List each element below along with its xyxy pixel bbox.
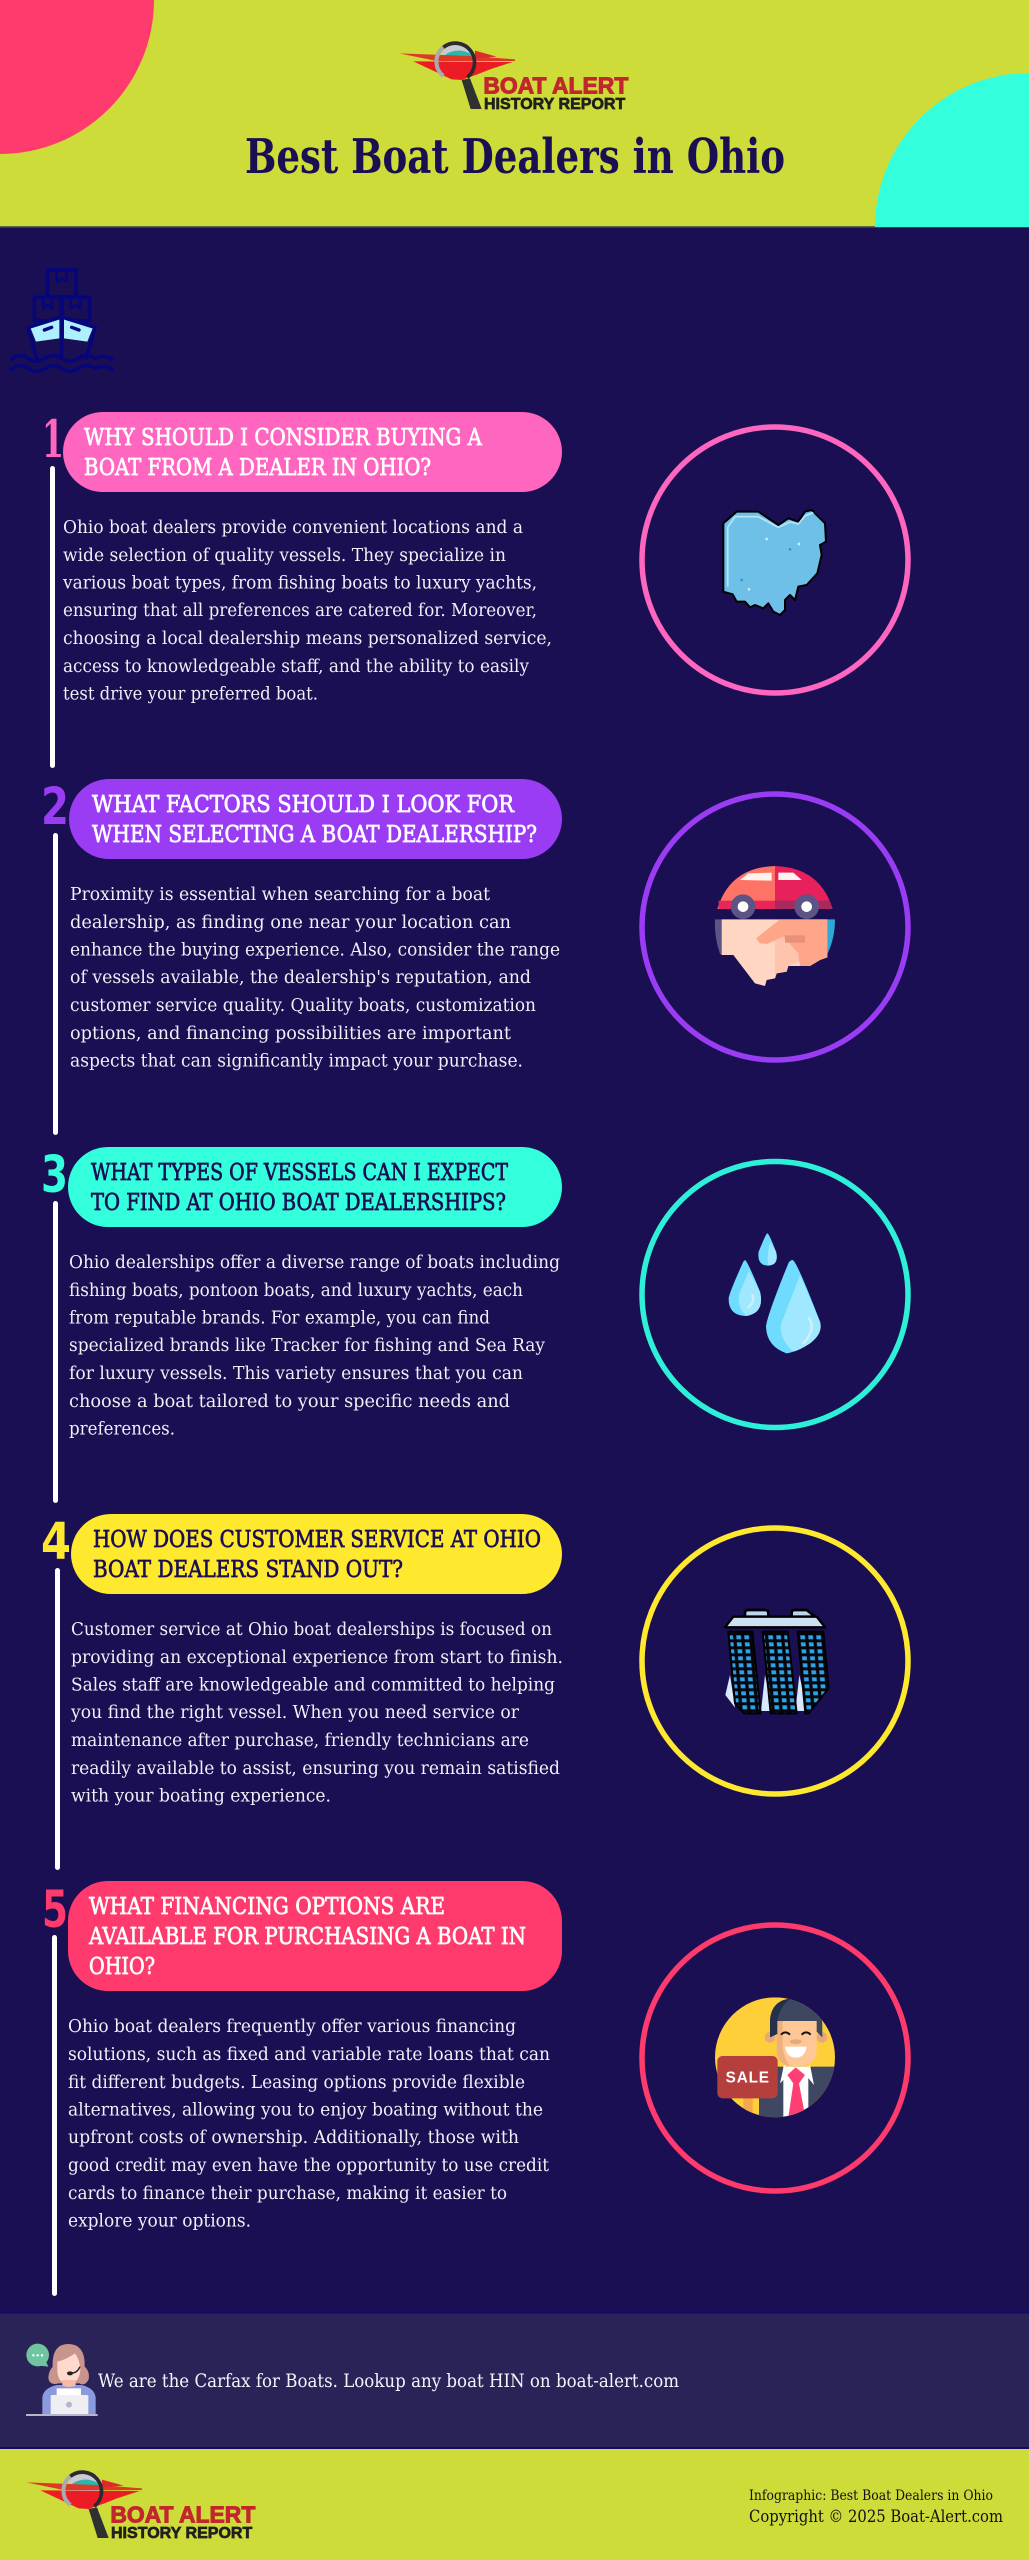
icon ring 4 with towers (642, 1528, 908, 1794)
body text 4: maintenance after purchase, friendly technicians are (71, 1731, 529, 1751)
heading pill 4: BOAT DEALERS STAND OUT? (93, 1557, 403, 1583)
callout text: We are the Carfax for Boats. Lookup any boat HIN on boat-alert.com (98, 2371, 679, 2392)
body text 4: Customer service at Ohio boat dealerships is focused on (71, 1620, 552, 1640)
callout band (0, 2312, 1029, 2449)
logo: Boat Alert footer: HISTORY REPORT (111, 2525, 253, 2542)
body text 2: of vessels available, the dealership's reputation, and (70, 968, 531, 988)
body text 2: options, and financing possibilities are important (70, 1024, 511, 1044)
heading pill 2 (69, 779, 562, 859)
body text 5: good credit may even have the opportunity to use credit (68, 2156, 549, 2176)
number 2: 2 (41, 778, 69, 837)
body text 1: various boat types, from fishing boats to luxury yachts, (62, 574, 537, 594)
body text 1: Ohio boat dealers provide convenient locations and a (63, 518, 523, 538)
body text 5: fit different budgets. Leasing options provide flexible (68, 2073, 525, 2093)
body text 5: upfront costs of ownership. Additionally, those with (68, 2128, 519, 2148)
body text 1: test drive your preferred boat. (63, 684, 318, 704)
timeline bar 5 (52, 1935, 57, 2296)
heading pill 2: WHEN SELECTING A BOAT DEALERSHIP? (92, 822, 537, 848)
heading pill 4: HOW DOES CUSTOMER SERVICE AT OHIO (93, 1527, 541, 1553)
number 4: 4 (41, 1513, 71, 1572)
body text 2: Proximity is essential when searching for a boat (70, 885, 490, 905)
decorative red quarter circle (0, 0, 154, 154)
body text 2 (70, 885, 560, 1072)
heading pill 1: BOAT FROM A DEALER IN OHIO? (84, 455, 431, 481)
body text 5: Ohio boat dealers frequently offer various financing (68, 2017, 516, 2037)
body text 2: dealership, as finding one near your location can (70, 913, 511, 933)
panel: section 3 (41, 1146, 908, 1503)
body text 1 (62, 518, 552, 704)
body text 5: solutions, such as fixed and variable rate loans that can (68, 2045, 550, 2065)
body text 4: you find the right vessel. When you need service or (70, 1703, 520, 1723)
number 3: 3 (41, 1146, 68, 1205)
heading pill 5: WHAT FINANCING OPTIONS ARE (89, 1894, 445, 1920)
body text 3: for luxury vessels. This variety ensures that you can (69, 1364, 523, 1384)
heading pill 3: TO FIND AT OHIO BOAT DEALERSHIPS? (91, 1190, 506, 1216)
timeline bar 2 (53, 833, 58, 1135)
body text 3: from reputable brands. For example, you can find (69, 1308, 490, 1328)
body text 2: aspects that can significantly impact your purchase. (70, 1052, 523, 1072)
heading pill 1: WHY SHOULD I CONSIDER BUYING A (84, 425, 482, 451)
body text 1: ensuring that all preferences are catered for. Moreover, (63, 601, 537, 621)
number 1: 1 (42, 410, 64, 470)
heading pill 5 (68, 1881, 562, 1991)
logo: Boat Alert header (399, 43, 628, 113)
panel: section 1 (42, 410, 908, 768)
body text 3: Ohio dealerships offer a diverse range of boats including (69, 1253, 560, 1273)
body text 5 (68, 2017, 550, 2232)
body text 3: preferences. (69, 1420, 175, 1440)
icon ring 3 with water drops (642, 1162, 908, 1428)
footer credit: Infographic: Best Boat Dealers in Ohio (749, 2488, 993, 2504)
logo: Boat Alert footer: BOAT ALERT (110, 2501, 255, 2527)
panel: section 5 (42, 1881, 908, 2296)
heading pill 5: OHIO? (89, 1954, 155, 1980)
panel: section 4 (41, 1513, 908, 1870)
body text 3: choose a boat tailored to your specific needs and (69, 1392, 510, 1412)
body text 5: alternatives, allowing you to enjoy boating without the (68, 2100, 543, 2120)
timeline bar 1 (50, 466, 55, 768)
timeline bar 3 (53, 1201, 58, 1503)
icon ring 1 with Ohio map (642, 427, 908, 693)
logo: Boat Alert header: HISTORY REPORT (484, 96, 626, 113)
heading pill 3 (68, 1147, 562, 1227)
icon: cargo ship (12, 270, 112, 371)
body text 1: access to knowledgeable staff, and the ability to easily (63, 657, 529, 677)
body text 3: fishing boats, pontoon boats, and luxury yachts, each (69, 1281, 523, 1301)
logo: Boat Alert footer (26, 2472, 255, 2542)
body text 2: enhance the buying experience. Also, consider the range (70, 940, 560, 960)
body text 4: providing an exceptional experience from start to finish. (71, 1648, 563, 1668)
body text 4: Sales staff are knowledgeable and committed to helping (71, 1676, 555, 1696)
timeline bar 4 (55, 1568, 60, 1870)
body text 4: readily available to assist, ensuring you remain satisfied (71, 1759, 560, 1779)
header band (0, 0, 1029, 228)
title: Best Boat Dealers in Ohio (245, 129, 785, 185)
body text 5: cards to finance their purchase, making it easier to (68, 2184, 507, 2204)
footer band (0, 2449, 1029, 2560)
heading pill 5: AVAILABLE FOR PURCHASING A BOAT IN (88, 1924, 526, 1950)
body text 1: wide selection of quality vessels. They specialize in (63, 546, 506, 566)
body text 3: specialized brands like Tracker for fishing and Sea Ray (69, 1336, 545, 1356)
number 5: 5 (42, 1881, 68, 1940)
heading pill 1 (63, 412, 562, 492)
body text 2: customer service quality. Quality boats, customization (70, 996, 536, 1016)
body text 4 (70, 1620, 563, 1806)
icon ring 5 with salesman: SALE (726, 2070, 769, 2087)
heading pill 2: WHAT FACTORS SHOULD I LOOK FOR (92, 792, 515, 818)
heading pill 4 (71, 1514, 562, 1594)
icon ring 2 with car and handshake (642, 794, 908, 1060)
decorative teal quarter circle (875, 73, 1029, 227)
body text 4: with your boating experience. (71, 1786, 331, 1806)
heading pill 3: WHAT TYPES OF VESSELS CAN I EXPECT (91, 1160, 509, 1186)
body text 5: explore your options. (68, 2212, 251, 2232)
body text 1: choosing a local dealership means personalized service, (63, 629, 552, 649)
panel: section 2 (41, 778, 908, 1135)
icon: support agent (26, 2344, 98, 2416)
body text 3 (69, 1253, 560, 1440)
icon ring 5 with salesman (642, 1925, 908, 2191)
logo: Boat Alert header: BOAT ALERT (483, 72, 628, 98)
